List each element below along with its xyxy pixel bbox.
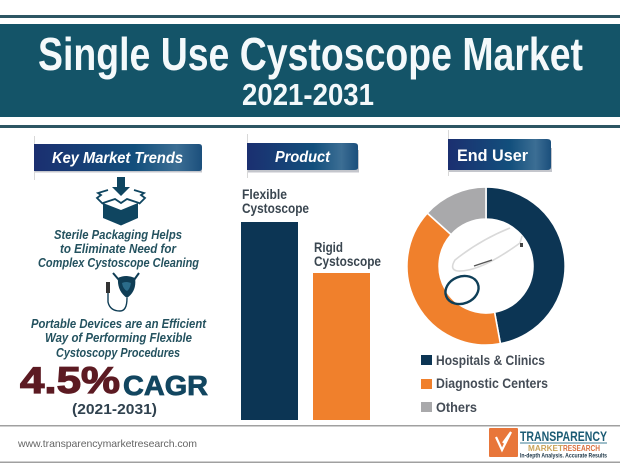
legend: hospitals: Hospitals & Clinics bbox=[436, 352, 545, 368]
bar: rigid cystoscope bbox=[313, 273, 370, 420]
CAGR callout: (2021-2031) bbox=[72, 401, 157, 418]
bar: flexible cystoscope bbox=[241, 222, 298, 420]
logo: Transparency Market Research bbox=[489, 428, 608, 460]
tag: Product bbox=[247, 134, 359, 178]
label: flexible: Flexible bbox=[242, 186, 287, 202]
title banner bbox=[0, 15, 620, 128]
text: sterile packaging trend: to Eliminate Need for bbox=[60, 241, 177, 256]
logo: Transparency Market Research: In-depth Analysis. Accurate Results bbox=[520, 454, 608, 460]
segment: diagnostic centers bbox=[407, 213, 500, 345]
text: sterile packaging trend: Complex Cystoscope Cleaning bbox=[38, 255, 199, 270]
text: portable devices trend: Portable Devices are an Efficient bbox=[31, 316, 207, 331]
tag: Key Market Trends: Key Market Trends bbox=[52, 150, 183, 167]
CAGR callout bbox=[20, 360, 208, 418]
text: sterile packaging trend bbox=[38, 227, 199, 270]
segment: hospitals and clinics bbox=[486, 187, 565, 344]
legend bbox=[421, 352, 548, 415]
legend: others: Others bbox=[436, 399, 477, 415]
icon: portable device bbox=[106, 273, 139, 311]
tag: Key Market Trends bbox=[34, 136, 202, 180]
subtitle: years: 2021-2031 bbox=[242, 77, 374, 112]
icon: flexible cystoscope bbox=[441, 228, 523, 309]
tag: End User: End User bbox=[457, 146, 528, 165]
website url: www.transparencymarketresearch.com bbox=[17, 438, 197, 450]
text: sterile packaging trend: Sterile Packaging Helps bbox=[54, 227, 182, 242]
text: portable devices trend: Cystoscopy Procedures bbox=[56, 345, 180, 360]
tag: Product: Product bbox=[275, 149, 331, 166]
tag: End User bbox=[448, 130, 552, 176]
segment: others bbox=[427, 187, 486, 235]
label: rigid: Cystoscope bbox=[314, 253, 381, 269]
CAGR callout: 4.5% bbox=[20, 360, 120, 401]
legend: diagnostic: Diagnostic Centers bbox=[436, 375, 548, 391]
text: portable devices trend: Way of Performing Flexible bbox=[45, 330, 192, 345]
label: flexible: Cystoscope bbox=[242, 200, 309, 216]
icon: sterile box with arrow bbox=[97, 177, 145, 226]
bar chart: product bbox=[241, 186, 381, 420]
donut chart: end user bbox=[407, 187, 565, 345]
text: portable devices trend bbox=[31, 316, 207, 360]
logo: Transparency Market Research: RESEARCH bbox=[563, 444, 600, 453]
CAGR callout: CAGR bbox=[123, 370, 208, 401]
label: rigid: Rigid bbox=[314, 239, 343, 255]
logo: Transparency Market Research: MARKET bbox=[528, 444, 563, 453]
